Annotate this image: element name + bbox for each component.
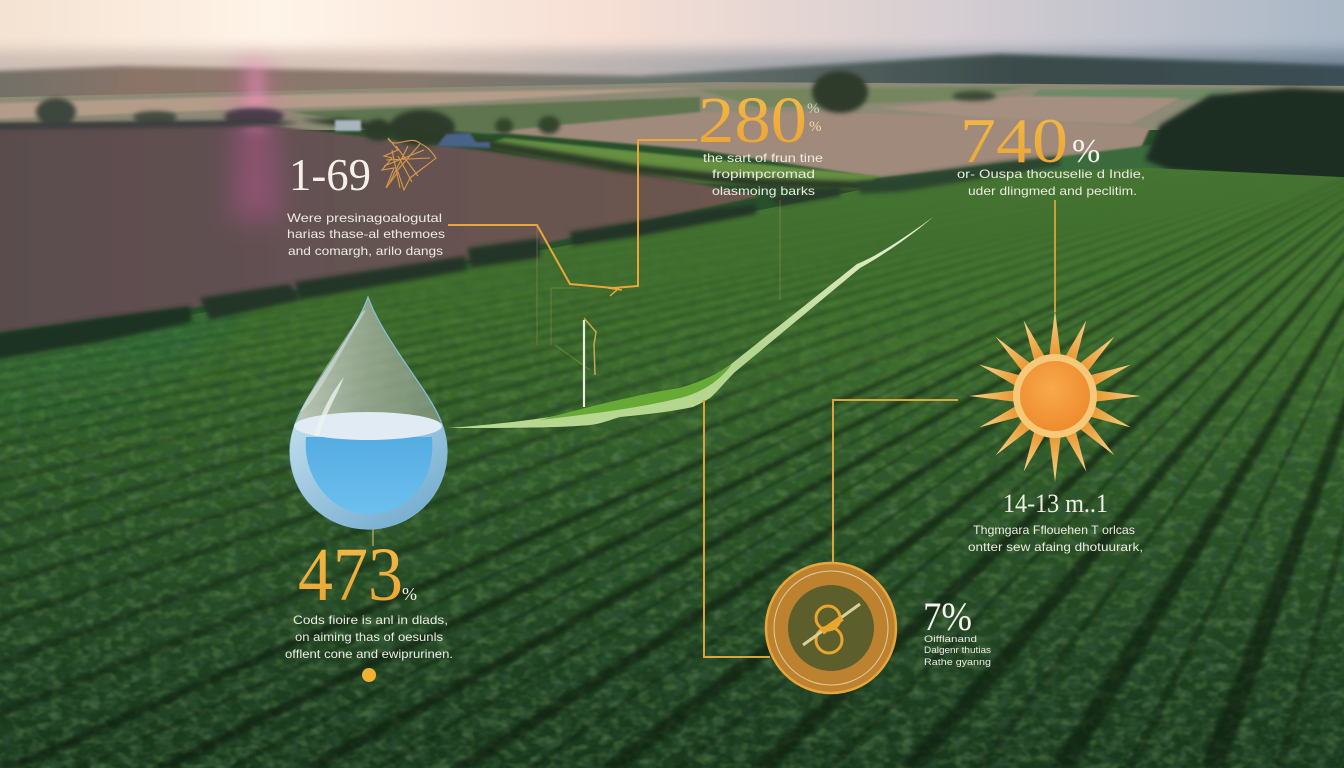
text block: sun description (968, 523, 1143, 554)
chart: orange connector from 1-69 text to 280% stat (448, 140, 780, 370)
chart: gold connector from coin to sun (833, 400, 958, 566)
text block: 1-69 description: Were presinagoalogutal (287, 211, 442, 225)
text block: 740% description (957, 167, 1145, 198)
text block: 740% description: or- Ouspa thocuselie d Indie, (957, 167, 1145, 181)
text block: sun description: Thgmgara Fflouehen T orlcas (973, 523, 1135, 537)
text block: sun description: ontter sew afaing dhotuurark, (968, 540, 1143, 554)
text block: 280% description: the sart of frun tine (703, 151, 823, 165)
stat: 280% heading: % (807, 101, 820, 117)
arrow: white upward pointer with gold head (584, 318, 596, 407)
text block: 473% description: offlent cone and ewiprurinen. (285, 647, 453, 661)
text block: 1-69 description: harias thase-al ethemoes (287, 227, 445, 241)
text block: 473% description: Cods fioire is anl in dlads, (293, 613, 448, 627)
text block: 280% description: fropimpcromad (712, 167, 815, 181)
chart: rising green leaf curve (448, 217, 933, 428)
text block: 1-69 description (287, 211, 445, 258)
stat: 473% heading: % (402, 584, 417, 604)
text block: 7% description: Rathe gyanng (924, 657, 991, 668)
stat: 740% heading: 740 (960, 105, 1068, 176)
icon: water drop (290, 297, 447, 546)
stat: 1-69 heading: 1-69 (289, 150, 371, 200)
text block: 280% description: olasmoing barks (712, 184, 815, 198)
text block: 7% description: Dalgenr thutias (924, 645, 991, 656)
chart: gold connector from 740% to sun (1054, 200, 1056, 312)
text block: 7% description (924, 634, 991, 668)
icon: gold scribble sketch beside 1-69 (382, 138, 436, 190)
stat: 280% heading: % (809, 119, 822, 135)
text block: 473% description: on aiming thas of oesunls (295, 630, 443, 644)
text block: 740% description: uder dlingmed and peclitim. (968, 184, 1137, 198)
text block: 7% description: Oifflanand (924, 634, 977, 645)
text block: 473% description (285, 613, 453, 661)
text block: 1-69 description: and comargh, arilo dangs (288, 244, 443, 258)
stat: 740% heading (960, 105, 1100, 176)
icon: sun (969, 310, 1141, 482)
icon: gold coin with tool emblem (766, 563, 896, 693)
marker: gold dot (362, 668, 376, 682)
stat: 14-13 m..1 heading: 14-13 m..1 (1003, 489, 1108, 518)
chart: gold connector from leaf down to coin (704, 400, 770, 657)
stat: 473% heading: 473 (298, 533, 403, 617)
text block: 280% description (703, 151, 823, 198)
stat: 740% heading: % (1072, 133, 1100, 170)
stat: 280% heading: 280 (698, 84, 807, 157)
stat: 7% heading: 7% (923, 594, 972, 639)
